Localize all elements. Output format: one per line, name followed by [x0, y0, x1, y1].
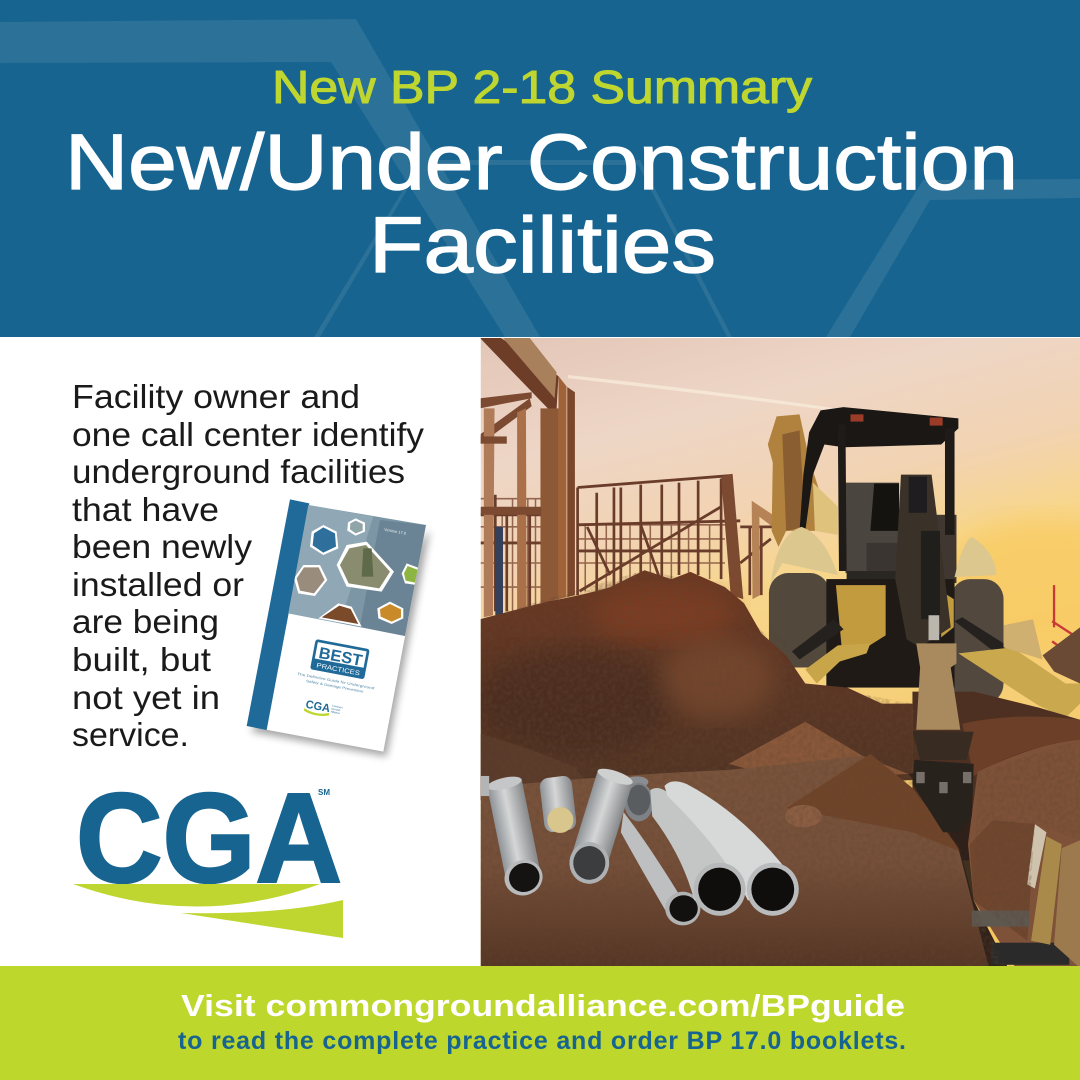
logo: CGA: SM	[318, 788, 330, 797]
panel: call-to-action footer	[0, 966, 1080, 1080]
booklet: Best Practices cover: Version 17.0	[384, 527, 407, 536]
background machinery and safety fencing	[1004, 585, 1080, 684]
booklet wordmark	[290, 637, 381, 725]
sunset sky	[480, 338, 1080, 968]
footer link line: Visit commongroundalliance.com/BPguide	[181, 988, 905, 1023]
body text: that have	[72, 491, 219, 528]
panel: header banner	[0, 0, 1080, 337]
body text: been newly	[72, 528, 253, 565]
body text: built, but	[72, 641, 211, 678]
booklet wordmark: CGA	[305, 699, 331, 715]
body text: one call center identify	[72, 416, 425, 453]
soil mound	[476, 570, 912, 800]
title: Facilities	[369, 200, 716, 289]
body text: not yet in	[72, 679, 220, 716]
ground with trench	[480, 692, 1080, 968]
timber house framing	[480, 338, 773, 617]
title	[65, 117, 1018, 289]
subtitle: New BP 2-18 Summary	[272, 61, 812, 113]
booklet wordmark: The Definitive Guide for Underground	[297, 672, 375, 690]
backhoe body	[768, 407, 1080, 718]
soil texture	[480, 570, 1080, 968]
booklet wordmark: Safety & Damage Prevention	[306, 679, 364, 694]
logo: CGA: CGA	[76, 767, 342, 909]
body text: installed or	[72, 566, 244, 603]
photo: backhoe digging trench at construction site	[476, 338, 1080, 968]
booklet wordmark: BEST	[317, 645, 364, 670]
booklet wordmark: PRACTICES	[316, 662, 361, 678]
booklet wordmark: Ground	[331, 707, 341, 712]
booklet wordmark: Common	[332, 704, 343, 710]
body text: are being	[72, 603, 219, 640]
body text	[72, 378, 425, 753]
body text: service.	[72, 716, 189, 753]
booklet wordmark: Alliance	[331, 709, 341, 715]
title: New/Under Construction	[65, 117, 1018, 206]
body text: underground facilities	[72, 453, 405, 490]
booklet: Best Practices cover	[247, 499, 430, 757]
footer note: to read the complete practice and order BP 17.0 booklets.	[178, 1027, 906, 1055]
conduit pipes	[481, 765, 799, 925]
backhoe stick and bucket	[912, 643, 974, 832]
body text: Facility owner and	[72, 378, 360, 415]
